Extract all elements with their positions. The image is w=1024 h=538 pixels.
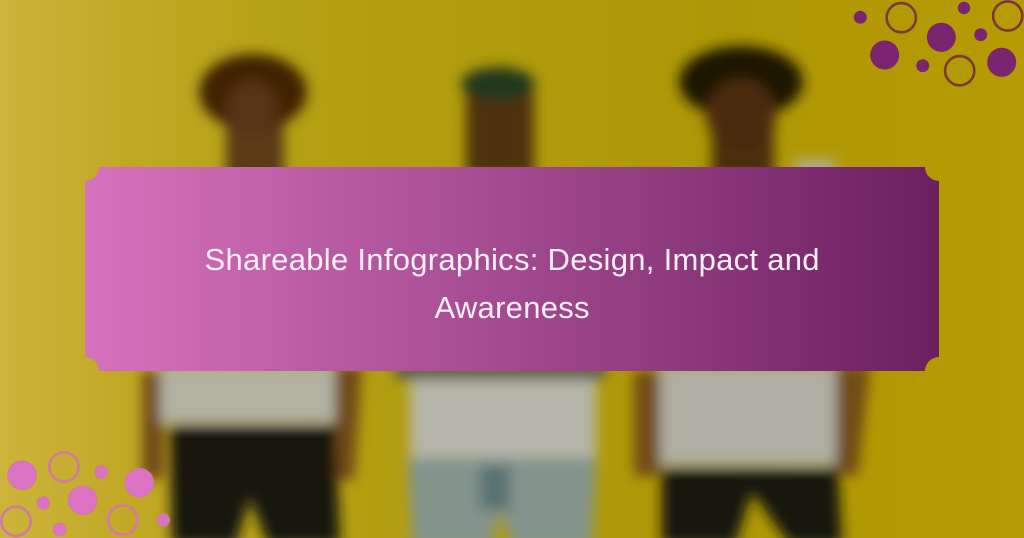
title: Awareness bbox=[434, 290, 590, 325]
photo: middle person bbox=[395, 67, 605, 538]
decoration: pink circles bottom left bbox=[1, 452, 170, 536]
photo: right person bbox=[634, 46, 870, 538]
photo: left person bbox=[142, 54, 362, 538]
title: Shareable Infographics: Design, Impact and bbox=[205, 242, 820, 277]
decoration: purple circles top right bbox=[854, 1, 1022, 85]
banner: title panel with notched corners bbox=[85, 167, 939, 371]
